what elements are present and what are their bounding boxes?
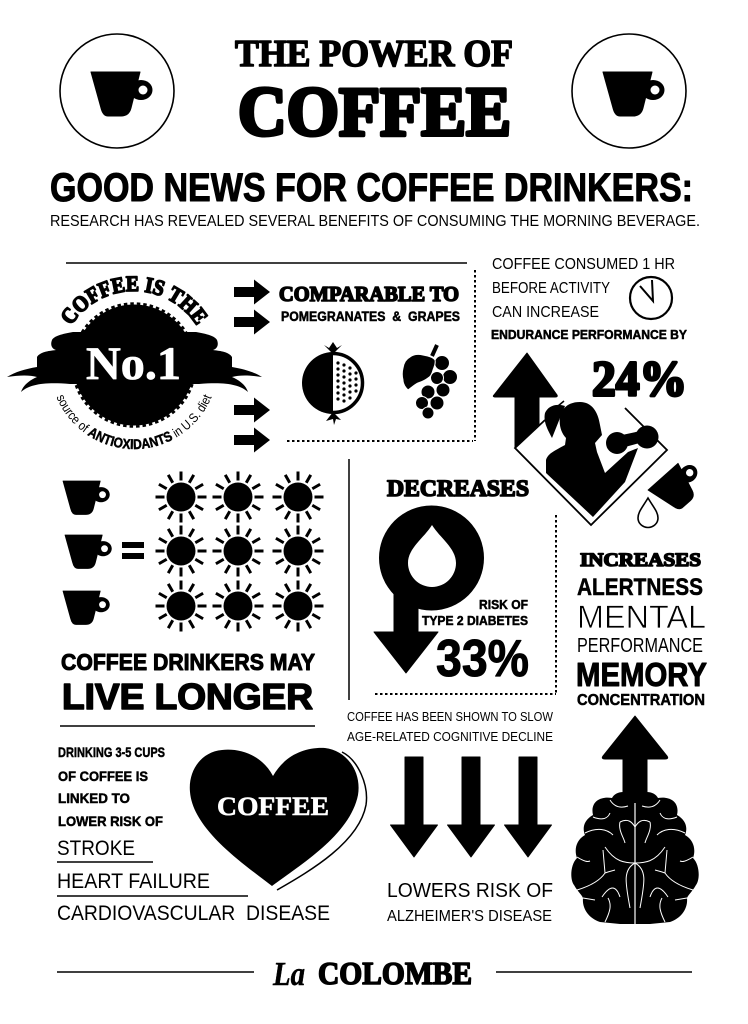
icon: brain	[571, 792, 699, 924]
list: stroke, heart failure, cardiovascular disease	[57, 837, 330, 925]
list: increases: ALERTNESS	[577, 574, 703, 601]
panel: No.1 antioxidants badge	[7, 276, 262, 450]
heading: coffee drinkers may: COFFEE DRINKERS MAY	[61, 649, 315, 675]
ribbon right	[179, 332, 262, 392]
seal text No.1: No.1	[86, 338, 181, 390]
cup bottom	[63, 591, 110, 624]
text: slow cognitive decline: AGE-RELATED COGNITIVE DECLINE	[347, 730, 553, 744]
icon: pomegranate	[302, 342, 362, 425]
arrows right group	[234, 280, 270, 452]
icon: heart: COFFEE	[217, 792, 329, 821]
list: increases: MENTAL	[577, 599, 706, 635]
text: lowers risk of alzheimers: LOWERS RISK OF	[387, 880, 553, 902]
text: slow cognitive decline	[347, 710, 553, 744]
equals sign	[122, 542, 144, 559]
arrow up to brain	[602, 716, 668, 800]
icon: woman with dumbbell in diamond	[515, 401, 667, 525]
list: stroke, heart failure, cardiovascular disease: CARDIOVASCULAR DISEASE	[57, 902, 330, 925]
list: stroke, heart failure, cardiovascular disease: STROKE	[57, 837, 135, 860]
list: increases: CONCENTRATION	[577, 692, 705, 709]
curved text bottom: source of ANTIOXIDANTS in U.S. diet	[56, 394, 212, 450]
text: coffee consumed	[492, 256, 675, 321]
list: increases: PERFORMANCE	[577, 635, 703, 657]
stat: 24%: 24%	[592, 350, 687, 406]
icon: right cup in circle	[572, 34, 686, 148]
arrow up	[493, 353, 557, 447]
stat: 33%: 33%	[436, 630, 529, 688]
title	[235, 33, 513, 151]
text: lowers risk of alzheimers	[387, 880, 553, 925]
icon: tilted cup	[648, 457, 710, 517]
heading: decreases: DECREASES	[387, 476, 529, 501]
footer logo	[57, 955, 692, 993]
ribbon left	[7, 332, 90, 392]
list: stroke, heart failure, cardiovascular disease: HEART FAILURE	[57, 870, 210, 893]
text: lowers risk of alzheimers: ALZHEIMER'S DISEASE	[387, 908, 552, 925]
three down arrows	[390, 757, 552, 857]
icon: grapes	[402, 345, 458, 419]
cups column	[63, 481, 110, 514]
subheading: pomegranates and grapes: POMEGRANATES & GRAPES	[281, 309, 460, 324]
cup middle	[65, 535, 112, 568]
text: coffee consumed: CAN INCREASE	[492, 304, 599, 321]
icon: clock	[630, 277, 672, 319]
text: drinking 3-5 cups: LOWER RISK OF	[58, 813, 163, 829]
text: risk of type 2 diabetes: RISK OF	[479, 597, 528, 612]
text: risk of type 2 diabetes: TYPE 2 DIABETES	[422, 613, 528, 628]
list: increases	[576, 550, 707, 709]
heading: live longer: LIVE LONGER	[62, 676, 313, 717]
icon: left cup in circle	[60, 34, 174, 148]
text: coffee consumed: COFFEE CONSUMED 1 HR	[492, 256, 675, 273]
text: drinking 3-5 cups	[58, 744, 165, 829]
title: COFFEE	[238, 74, 511, 151]
text: drinking 3-5 cups: OF COFFEE IS	[58, 768, 148, 784]
sun grid	[156, 472, 324, 632]
footer logo: La	[272, 956, 305, 993]
icon: drop	[638, 498, 658, 528]
seal	[72, 304, 196, 426]
curved text top: COFFEE IS THE	[62, 276, 208, 326]
text: drinking 3-5 cups: DRINKING 3-5 CUPS	[58, 744, 165, 760]
list: increases: INCREASES	[580, 550, 701, 571]
text: coffee consumed: BEFORE ACTIVITY	[492, 280, 610, 297]
text: endurance performance by: ENDURANCE PERFORMANCE BY	[491, 328, 688, 342]
footer logo: COLOMBE	[318, 955, 472, 991]
text: slow cognitive decline: COFFEE HAS BEEN SHOWN TO SLOW	[347, 710, 553, 724]
text: drinking 3-5 cups: LINKED TO	[58, 790, 130, 806]
text: risk of type 2 diabetes	[422, 597, 528, 628]
heading: comparable to: COMPARABLE TO	[279, 282, 459, 306]
title: THE POWER OF	[235, 33, 513, 75]
list: increases: MEMORY	[576, 656, 707, 693]
icon: heart	[190, 748, 366, 890]
icon: diabetes arrow	[374, 506, 484, 673]
